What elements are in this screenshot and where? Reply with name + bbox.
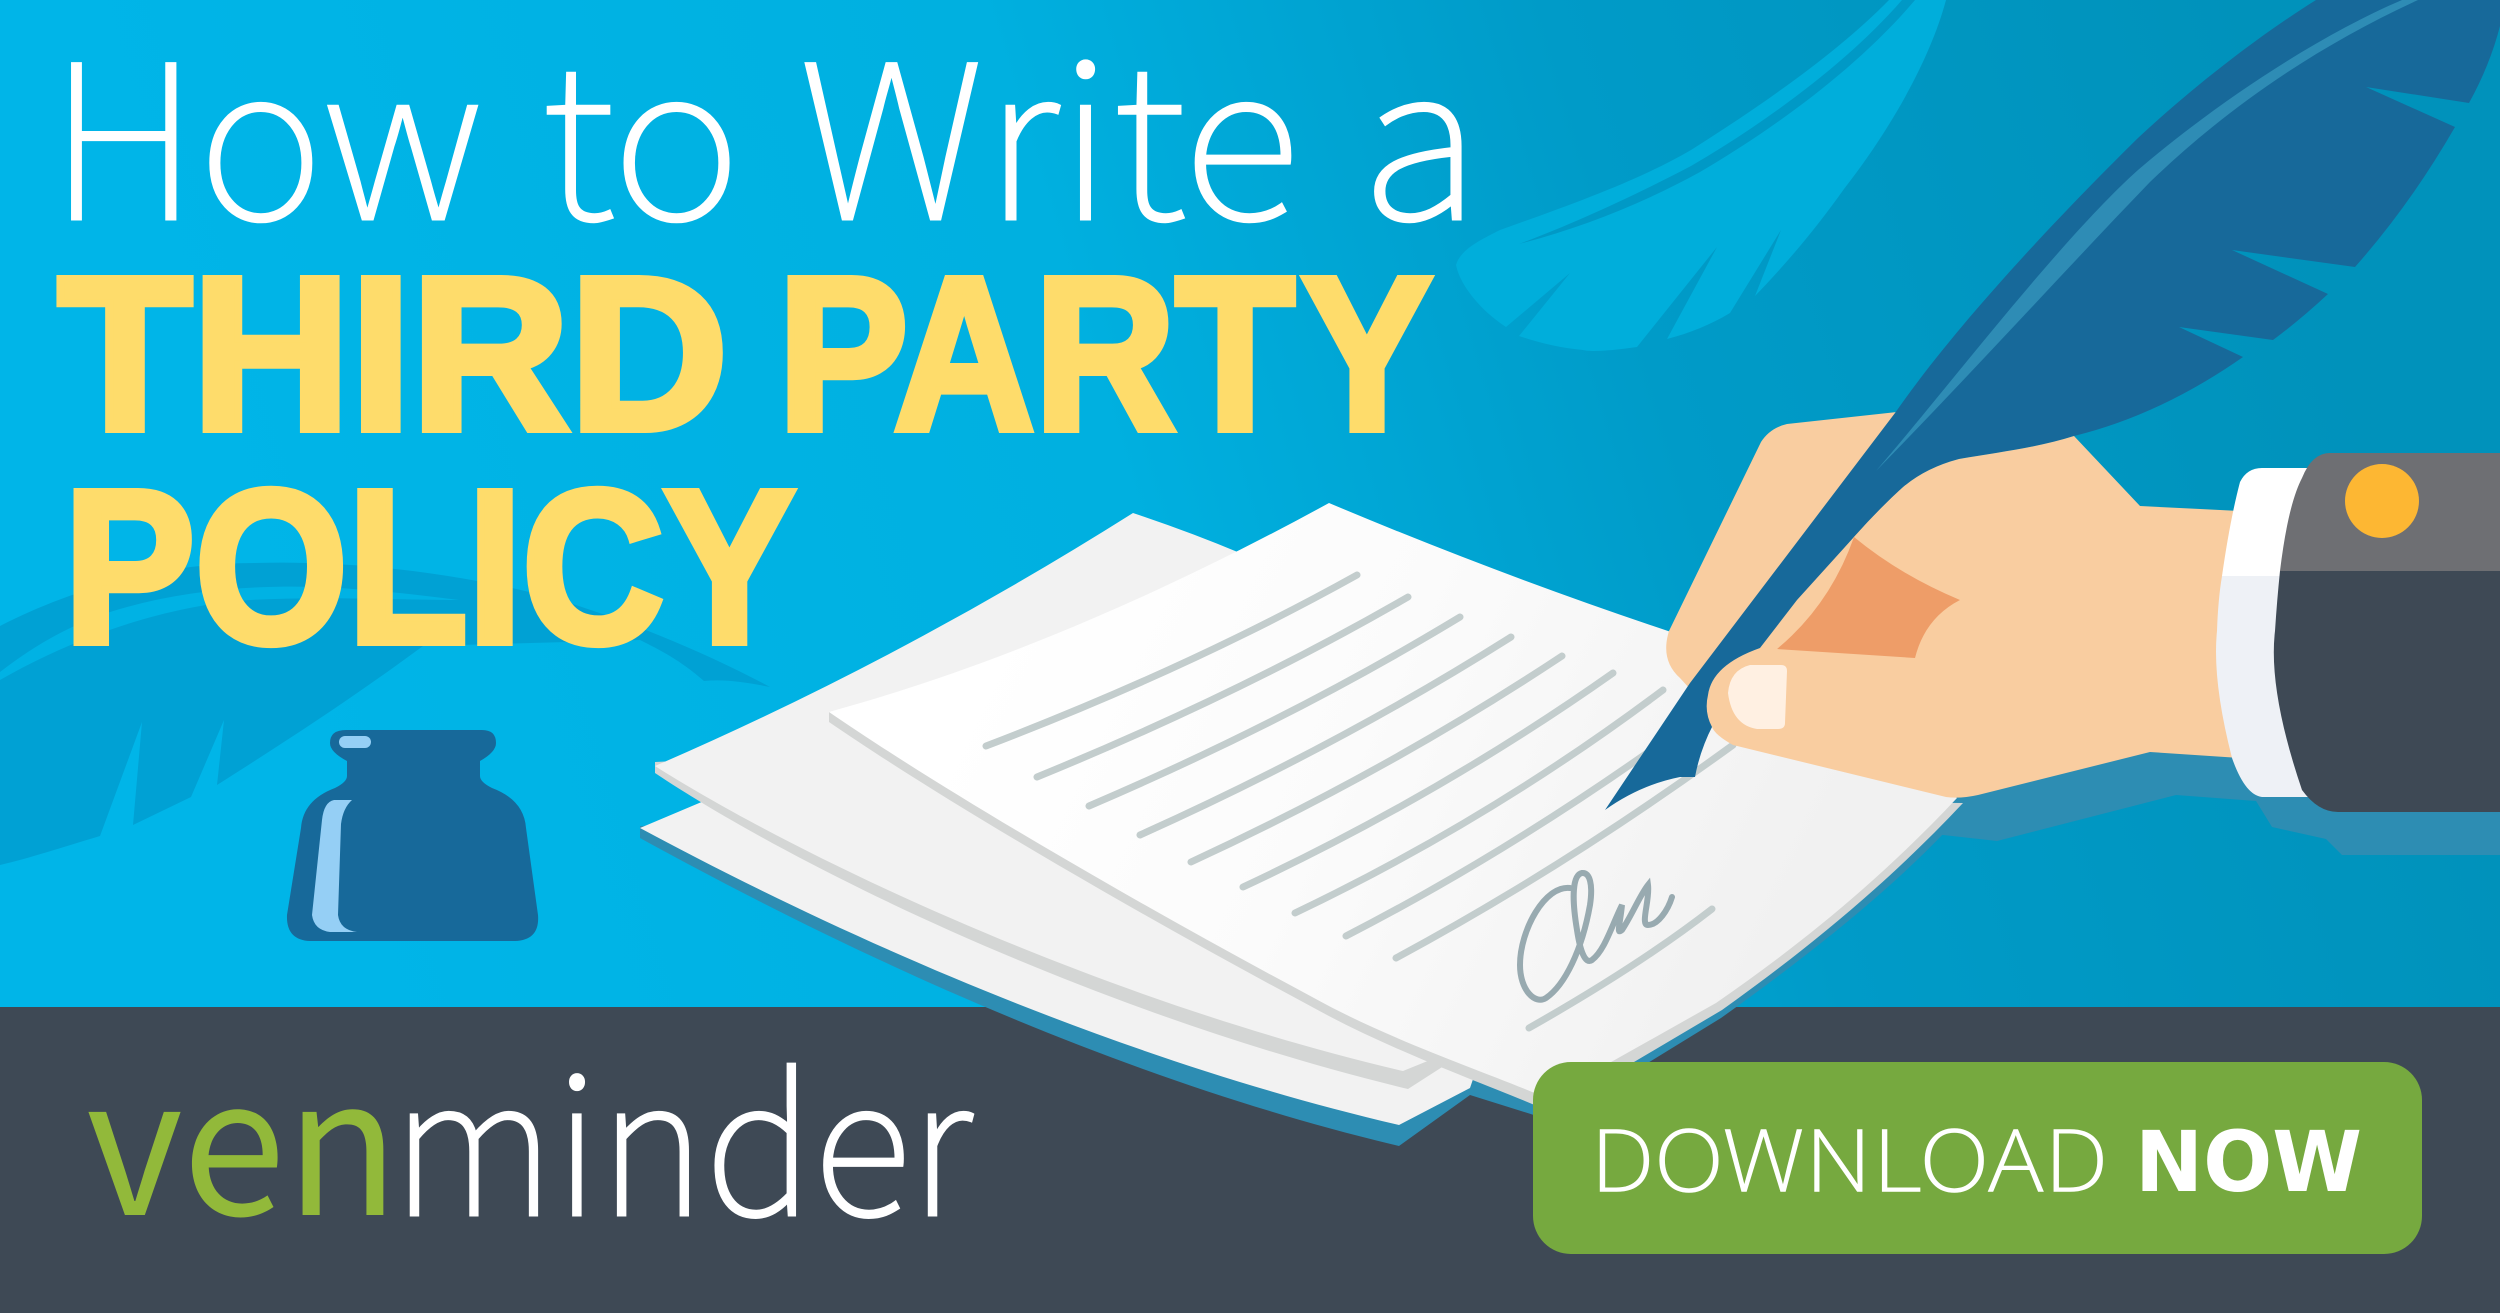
jacket sleeve (2274, 453, 2500, 812)
button: download now: NOW (2135, 1113, 2362, 1211)
bottom dark band (0, 1007, 2500, 1313)
shirt cuff (2216, 468, 2320, 797)
title line: How to Write a (49, 0, 1480, 281)
logo: venminder: minder (392, 995, 974, 1270)
palm and thumb (1707, 436, 2240, 798)
logo: venminder (86, 995, 974, 1270)
background feather: top right (1456, 0, 1946, 351)
palm shading (1777, 537, 1960, 658)
back finger (1666, 412, 1900, 700)
button: download now (1533, 1062, 2422, 1254)
paper stack (640, 503, 1963, 1146)
sleeve button (2345, 464, 2419, 538)
background (0, 0, 2500, 1008)
title line: THIRD PARTY (58, 233, 1432, 476)
logo: venminder: ven (86, 995, 399, 1270)
signature (1520, 873, 1672, 1000)
button: download now: DOWNLOAD (1590, 1095, 2108, 1216)
middle sheet edge (655, 750, 1450, 1089)
hand (1707, 436, 2240, 798)
lower sheet (640, 700, 1500, 1125)
thumbnail (1728, 665, 1787, 729)
paper shadow (640, 798, 1957, 1146)
document text lines (986, 575, 1733, 1028)
hand and sleeve shadow (1900, 745, 2500, 855)
background feather: left (0, 563, 770, 865)
title line: THIRD PARTY: THIRD (58, 233, 728, 476)
quill feather (1605, 0, 2500, 810)
title line: POLICY: POLICY (64, 446, 795, 689)
title line: THIRD PARTY: PARTY (778, 233, 1432, 476)
front sheet edge (829, 712, 1963, 1106)
front sheet (829, 503, 1957, 1094)
icon: ink bottle (287, 730, 538, 941)
middle sheet (655, 513, 1500, 1071)
